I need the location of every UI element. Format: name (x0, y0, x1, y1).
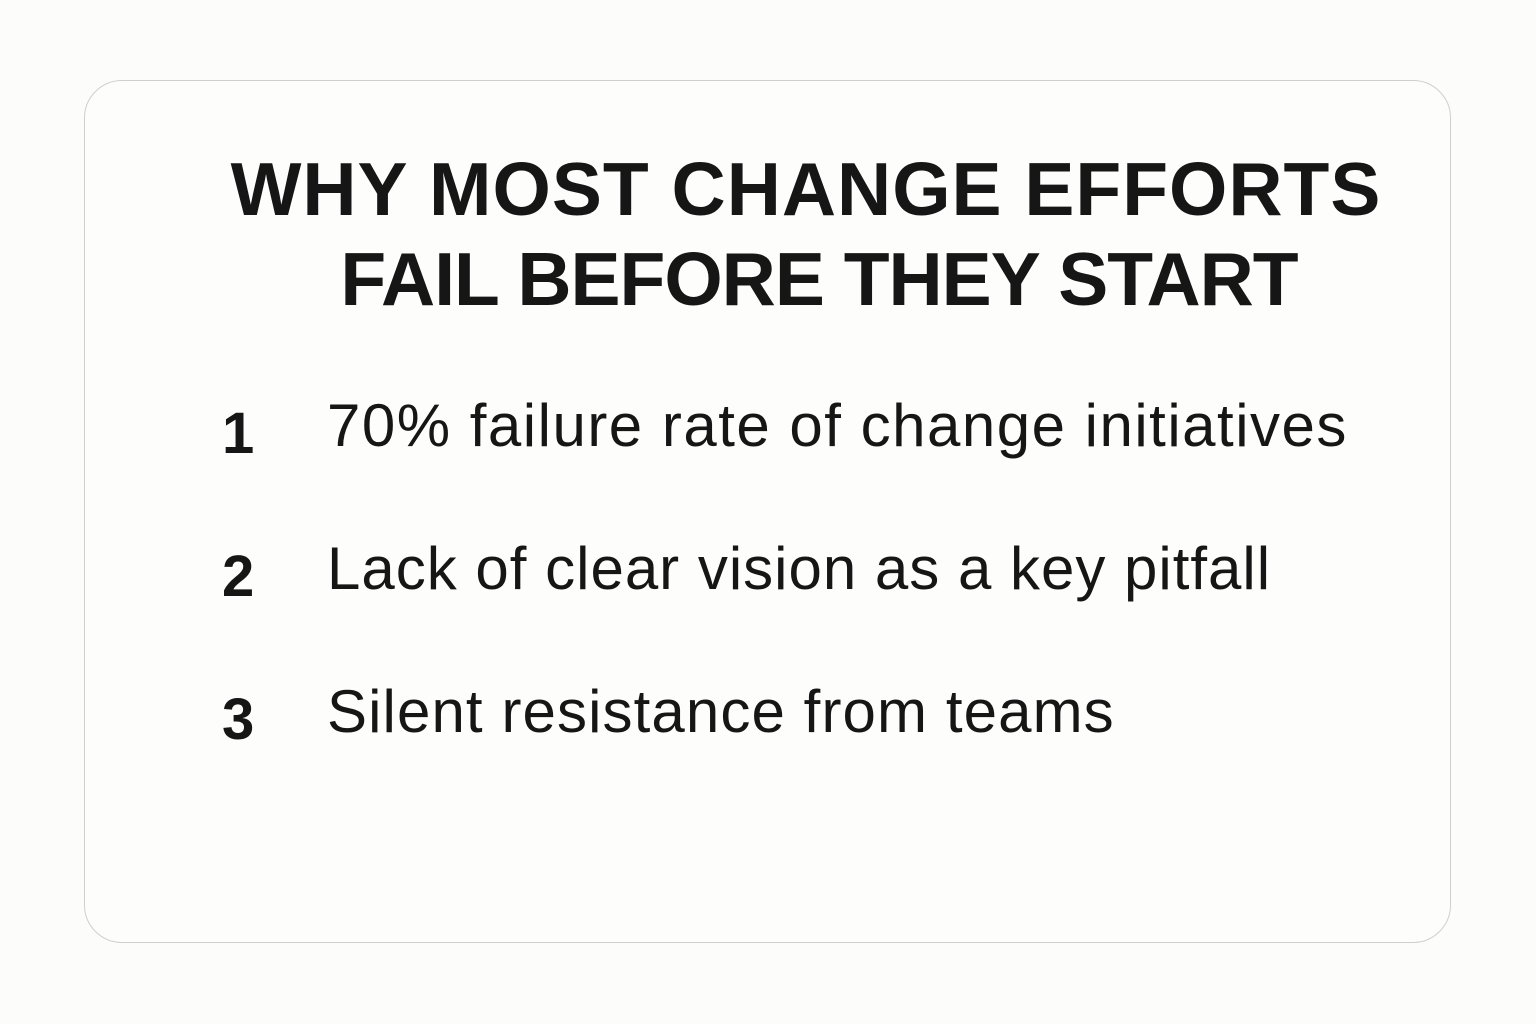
text: 1 (222, 401, 254, 466)
list item 3 (222, 678, 1115, 752)
panel: card (84, 80, 1451, 943)
title (230, 147, 1381, 321)
title: WHY MOST CHANGE EFFORTS (231, 147, 1381, 231)
list item 1 (222, 392, 1348, 466)
text: 2 (222, 544, 254, 609)
text: 70% failure rate of change initiatives (327, 392, 1348, 459)
title: FAIL BEFORE THEY START (340, 237, 1298, 321)
list item 2 (222, 535, 1271, 609)
text: Lack of clear vision as a key pitfall (327, 535, 1271, 602)
text: 3 (222, 687, 254, 752)
text: Silent resistance from teams (327, 678, 1115, 745)
